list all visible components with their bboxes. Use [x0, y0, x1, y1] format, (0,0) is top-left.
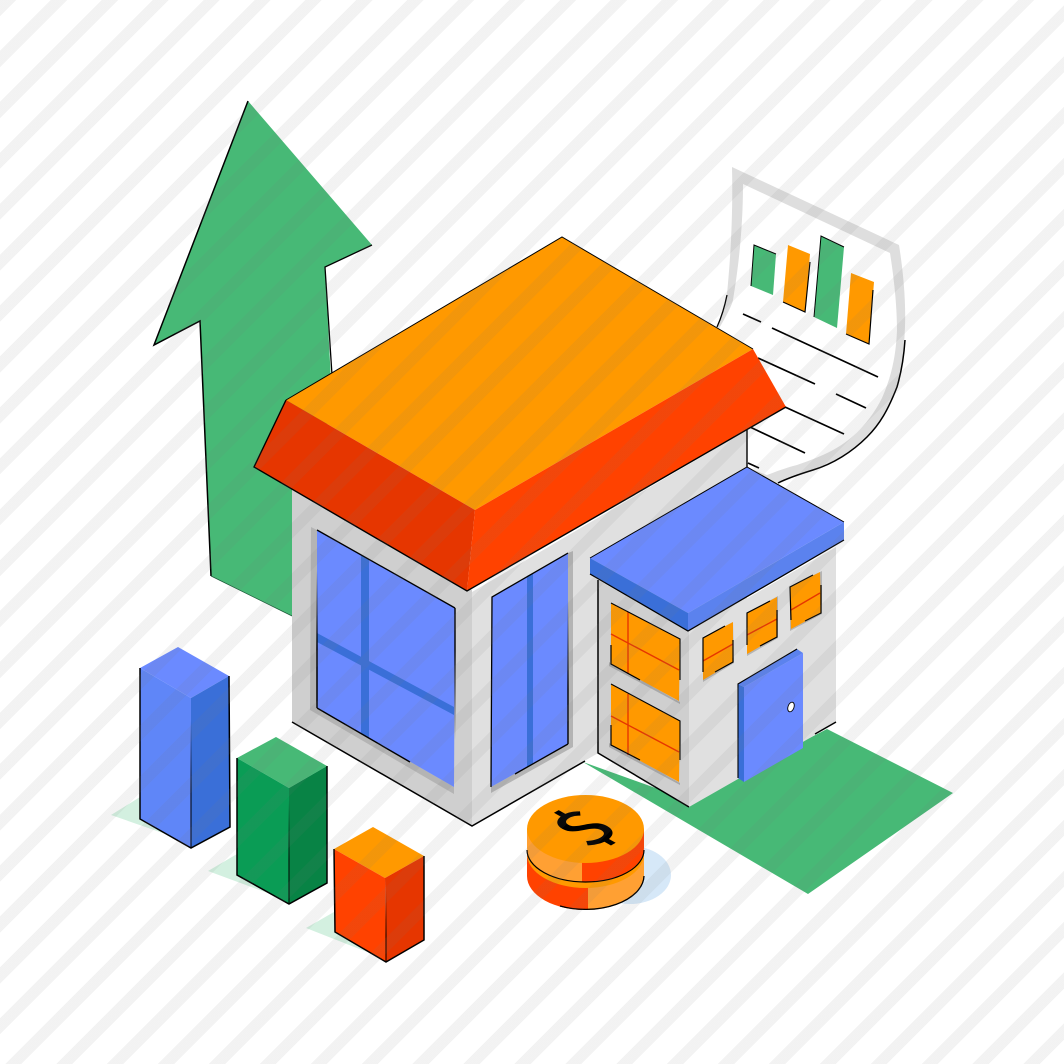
icon: dollar coin stack — [521, 791, 671, 910]
coin shadow — [589, 846, 671, 904]
large left window — [310, 527, 455, 794]
left wall — [292, 488, 472, 826]
green ground plot — [583, 729, 953, 894]
annex blue door — [738, 649, 803, 782]
panel: main building — [254, 237, 786, 826]
main roof — [254, 237, 786, 591]
door knob — [786, 701, 796, 713]
blue bar — [111, 647, 230, 848]
document text lines — [743, 314, 878, 468]
tall right window — [491, 551, 573, 793]
bar chart: isometric bars — [111, 647, 424, 962]
panel: small annex building — [590, 467, 844, 807]
annex lower-left window — [609, 684, 680, 785]
document bar chart — [751, 236, 874, 344]
dollar sign: $ — [521, 791, 640, 860]
icon: green growth arrow — [154, 101, 372, 616]
annex small windows — [703, 571, 822, 682]
panel: curled report document — [700, 167, 905, 490]
annex upper-left window — [609, 603, 680, 704]
right wall — [472, 430, 747, 826]
green bar — [208, 737, 327, 904]
annex right wall — [689, 547, 836, 807]
annex blue roof — [590, 467, 844, 631]
lower coin — [527, 820, 644, 910]
orange-red bar — [306, 827, 424, 962]
annex left wall — [598, 580, 689, 807]
upper coin — [527, 795, 644, 882]
